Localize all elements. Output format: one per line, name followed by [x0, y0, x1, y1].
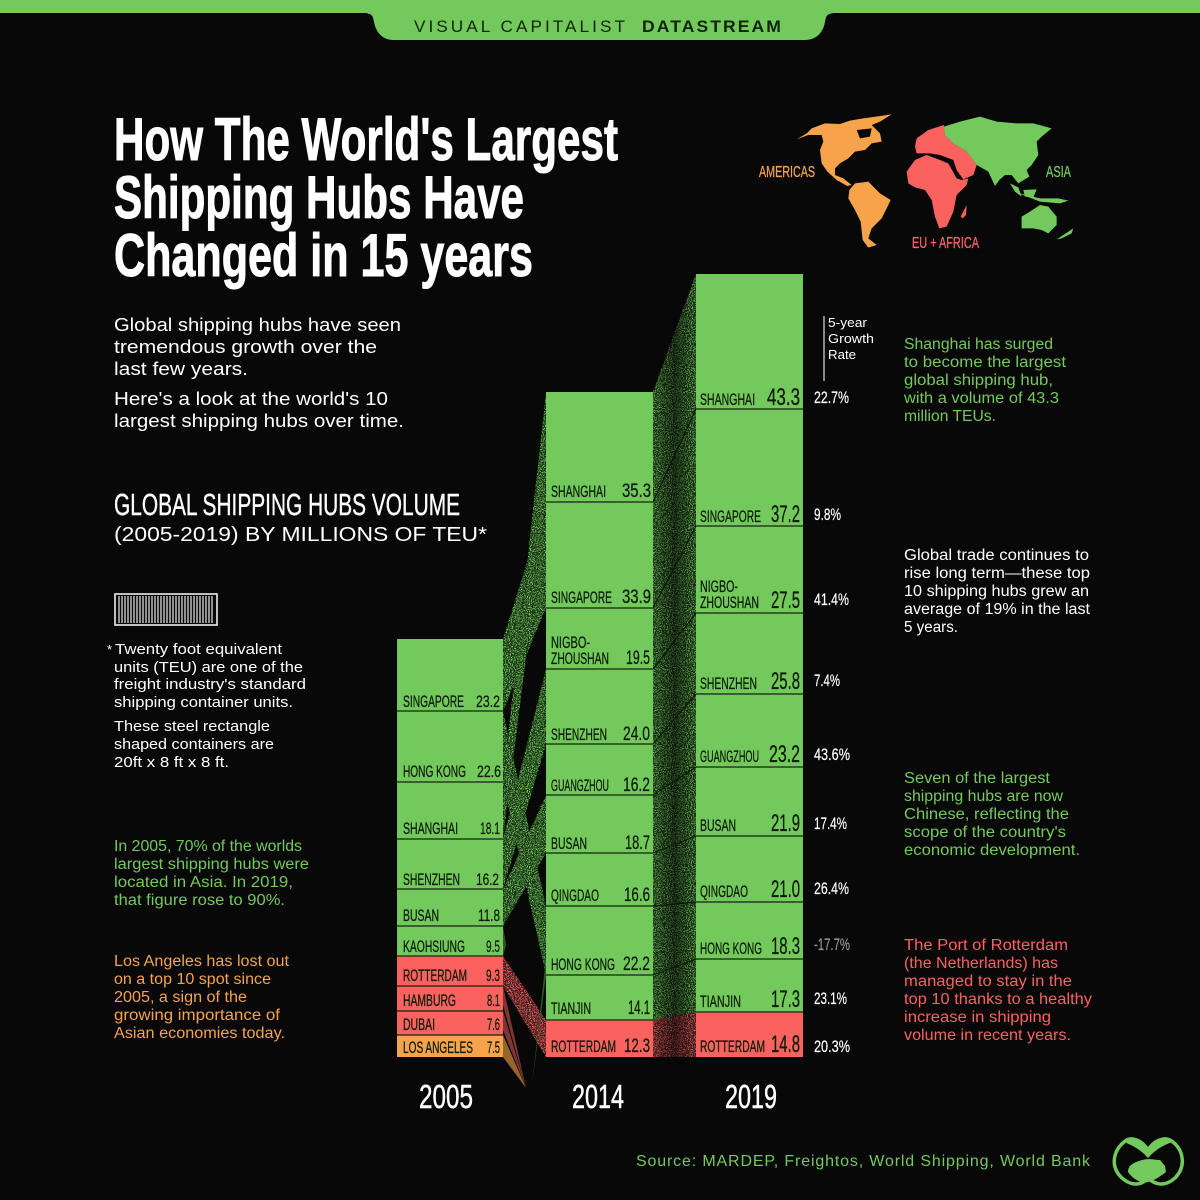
column: 2014: GUANGZHOU	[551, 776, 609, 795]
column: 2005: SHENZHEN	[403, 870, 460, 889]
column: 2005: 8.1	[487, 991, 500, 1010]
chart heading: (2005-2019) BY MILLIONS OF TEU*	[114, 524, 487, 546]
growth rate values: -17.7%	[814, 935, 850, 954]
TEU footnote: *	[107, 642, 112, 657]
callout: global trade: rise long term—these top	[904, 565, 1090, 582]
intro text: last few years.	[114, 358, 248, 379]
map labels: ASIA	[1046, 164, 1071, 181]
column: 2005: LOS ANGELES	[403, 1038, 473, 1057]
column: 2019: SHANGHAI	[700, 390, 755, 409]
column: 2019: 18.3	[771, 933, 800, 960]
callout: Asia share	[114, 838, 309, 909]
column: 2019: ZHOUSHAN	[700, 593, 759, 612]
callout: Rotterdam: top 10 thanks to a healthy	[904, 991, 1092, 1008]
header banner: VISUAL CAPITALIST	[414, 17, 628, 36]
column: 2019: 17.3	[771, 986, 800, 1013]
growth rate values: 22.7%	[814, 388, 849, 407]
growth rate values: 20.3%	[814, 1037, 850, 1056]
growth rate header: 5-year	[828, 316, 867, 330]
callout: Los Angeles: Los Angeles has lost out	[114, 953, 290, 970]
callout: Asia share: largest shipping hubs were	[114, 856, 309, 873]
title: How The World's Largest	[114, 106, 618, 173]
callout: Los Angeles: growing importance of	[114, 1007, 281, 1024]
map labels: AMERICAS	[759, 164, 815, 181]
callout: Asia share: located in Asia. In 2019,	[114, 874, 293, 891]
callout: Shanghai: million TEUs.	[904, 408, 996, 425]
growth rate values: 41.4%	[814, 590, 849, 609]
column: 2005: 9.3	[486, 966, 500, 985]
source: Source: MARDEP, Freightos, World Shipping, World Bank	[636, 1153, 1091, 1170]
column: 2019: 43.3	[767, 384, 800, 411]
year labels: 2005	[419, 1078, 473, 1115]
growth rate values: 17.4%	[814, 814, 847, 833]
icon: Visual Capitalist logo	[1114, 1139, 1182, 1184]
column: 2014: NIGBO-	[551, 633, 590, 652]
column: 2019: 23.2	[769, 741, 800, 768]
callout: Shanghai: to become the largest	[904, 354, 1067, 371]
growth rate values: 7.4%	[814, 671, 840, 690]
TEU footnote: Twenty foot equivalent	[115, 641, 283, 658]
TEU footnote	[107, 641, 306, 771]
column: 2014: 35.3	[622, 481, 651, 502]
column: 2014: 12.3	[624, 1036, 650, 1057]
column: 2019: QINGDAO	[700, 882, 748, 901]
column: 2019: 14.8	[771, 1031, 800, 1058]
column: 2005: SHANGHAI	[403, 819, 458, 838]
column: 2019: 27.5	[771, 587, 800, 614]
column: 2014: 14.1	[628, 998, 650, 1019]
growth rate values	[814, 388, 850, 1056]
map: Asia and Oceania	[944, 117, 1073, 239]
column: 2005: BUSAN	[403, 906, 439, 925]
callout: global trade: 10 shipping hubs grew an	[904, 583, 1089, 600]
column: 2005: DUBAI	[403, 1015, 435, 1034]
column: 2014: ZHOUSHAN	[551, 649, 609, 668]
intro text: tremendous growth over the	[114, 336, 377, 357]
TEU footnote: freight industry's standard	[114, 676, 306, 693]
TEU footnote: shipping container units.	[114, 694, 293, 711]
callout: Rotterdam	[904, 937, 1092, 1044]
callout: Shanghai: Shanghai has surged	[904, 336, 1053, 353]
column: 2014: 16.2	[623, 775, 650, 796]
callout: Los Angeles: on a top 10 spot since	[114, 971, 271, 988]
callout: Rotterdam: (the Netherlands) has	[904, 955, 1058, 972]
intro text: largest shipping hubs over time.	[114, 410, 404, 431]
column: 2005: ROTTERDAM	[403, 966, 467, 985]
growth rate header	[824, 316, 874, 381]
column: 2005: KAOHSIUNG	[403, 937, 465, 956]
flow ribbons 2005 to 2014	[503, 392, 546, 1088]
column: 2014: SINGAPORE	[551, 588, 612, 607]
column: 2019: BUSAN	[700, 816, 736, 835]
growth rate header: Growth	[828, 332, 874, 346]
year labels: 2014	[572, 1078, 624, 1115]
callout: Asia share: that figure rose to 90%.	[114, 892, 285, 909]
column: 2014: 33.9	[622, 587, 651, 608]
growth rate values: 23.1%	[814, 989, 847, 1008]
column: 2014: 22.2	[623, 954, 650, 975]
growth rate header: Rate	[828, 348, 856, 362]
title: Shipping Hubs Have	[114, 164, 524, 231]
growth rate values: 26.4%	[814, 879, 849, 898]
callout: Chinese hubs: shipping hubs are now	[904, 788, 1064, 805]
TEU footnote: These steel rectangle	[114, 718, 270, 735]
title	[114, 106, 618, 289]
callout: Rotterdam: volume in recent years.	[904, 1027, 1071, 1044]
callout: Shanghai	[903, 336, 1067, 425]
column: 2019: 21.0	[771, 876, 800, 903]
intro text: Global shipping hubs have seen	[114, 314, 401, 335]
callout: global trade: 5 years.	[904, 619, 958, 636]
map: Europe and Africa	[907, 125, 977, 228]
column: 2014: SHENZHEN	[551, 725, 607, 744]
callout: global trade	[904, 547, 1091, 636]
growth rate values: 43.6%	[814, 745, 850, 764]
column: 2005: 11.8	[478, 906, 500, 925]
callout: Chinese hubs: Seven of the largest	[904, 770, 1051, 787]
title: Changed in 15 years	[114, 222, 533, 289]
column: 2005: SINGAPORE	[403, 692, 464, 711]
intro text: Here's a look at the world's 10	[114, 388, 388, 409]
callout: global trade: average of 19% in the last	[904, 601, 1091, 618]
TEU footnote: units (TEU) are one of the	[114, 659, 303, 676]
column: 2005: 18.1	[480, 819, 500, 838]
column: 2014: 24.0	[623, 724, 650, 745]
column: 2005: 7.5	[487, 1038, 500, 1057]
column: 2005: 23.2	[476, 692, 500, 711]
TEU footnote: shaped containers are	[114, 736, 274, 753]
map: Americas	[797, 114, 892, 248]
icon: shipping container	[115, 594, 217, 625]
growth rate values: 9.8%	[814, 505, 841, 524]
column: 2005: HAMBURG	[403, 991, 456, 1010]
world map legend	[759, 114, 1073, 252]
callout: Shanghai: global shipping hub,	[904, 372, 1053, 389]
callout: Rotterdam: managed to stay in the	[904, 973, 1072, 990]
callout: Chinese hubs	[904, 770, 1080, 859]
column: 2005	[397, 639, 503, 1057]
column: 2014: HONG KONG	[551, 955, 615, 974]
column: 2005: HONG KONG	[403, 762, 466, 781]
chart heading	[114, 487, 487, 546]
column: 2014: BUSAN	[551, 834, 587, 853]
column: 2014: 16.6	[624, 885, 650, 906]
column: 2019: 37.2	[771, 501, 800, 528]
column: 2014: 18.7	[625, 833, 650, 854]
callout: Chinese hubs: scope of the country's	[904, 824, 1066, 841]
callout: Los Angeles	[114, 953, 290, 1042]
intro text	[114, 314, 404, 431]
column: 2014: ROTTERDAM	[551, 1037, 616, 1056]
header banner: DATASTREAM	[642, 17, 783, 36]
callout: Chinese hubs: Chinese, reflecting the	[904, 806, 1069, 823]
column: 2019: TIANJIN	[700, 992, 741, 1011]
column: 2014: SHANGHAI	[551, 482, 606, 501]
column: 2014: 19.5	[626, 648, 650, 669]
year labels: 2019	[725, 1078, 777, 1115]
callout: Shanghai: with a volume of 43.3	[903, 390, 1059, 407]
map labels	[759, 164, 1071, 252]
column: 2019: SINGAPORE	[700, 507, 761, 526]
column: 2019: ROTTERDAM	[700, 1037, 765, 1056]
callout: Los Angeles: 2005, a sign of the	[114, 989, 247, 1006]
header banner	[0, 0, 1200, 40]
callout: Los Angeles: Asian economies today.	[114, 1025, 285, 1042]
callout: Asia share: In 2005, 70% of the worlds	[114, 838, 302, 855]
TEU footnote: 20ft x 8 ft x 8 ft.	[114, 754, 229, 771]
column: 2019: 25.8	[771, 668, 800, 695]
callout: Rotterdam: The Port of Rotterdam	[904, 937, 1068, 954]
column: 2005: 16.2	[476, 870, 499, 889]
year labels	[419, 1078, 777, 1115]
map labels: EU + AFRICA	[912, 235, 979, 252]
column: 2005: 7.6	[487, 1015, 500, 1034]
column: 2014	[546, 392, 653, 1057]
column: 2019: SHENZHEN	[700, 674, 757, 693]
column: 2014: QINGDAO	[551, 886, 599, 905]
column: 2019: 21.9	[771, 810, 800, 837]
column: 2019: NIGBO-	[700, 577, 738, 596]
column: 2019: HONG KONG	[700, 939, 762, 958]
chart heading: GLOBAL SHIPPING HUBS VOLUME	[114, 487, 460, 522]
column: 2014: TIANJIN	[551, 999, 591, 1018]
column: 2005: 22.6	[477, 762, 501, 781]
callout: Rotterdam: increase in shipping	[904, 1009, 1051, 1026]
column: 2005: 9.5	[486, 937, 500, 956]
flow ribbons 2014 to 2019	[653, 274, 696, 1057]
callout: Chinese hubs: economic development.	[904, 842, 1080, 859]
callout: global trade: Global trade continues to	[904, 547, 1089, 564]
column: 2019: GUANGZHOU	[700, 747, 759, 766]
column: 2019	[696, 274, 803, 1058]
